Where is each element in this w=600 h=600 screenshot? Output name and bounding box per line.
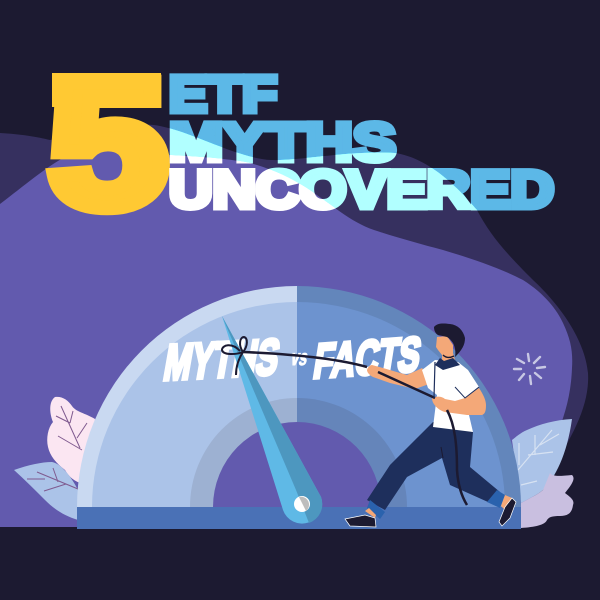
gauge right half: facts [297, 286, 521, 507]
shirt [422, 360, 479, 432]
needle [222, 316, 322, 524]
title line: MYTHS: MYTHS [169, 112, 396, 172]
label: vs: vs [289, 345, 311, 370]
back arm [367, 365, 432, 389]
choker line [443, 355, 454, 357]
title line: UNCOVERED: UNCOVERED [169, 160, 554, 220]
shirt rope strand [434, 362, 435, 398]
hair [434, 323, 465, 357]
character pulling rope [222, 323, 516, 527]
gauge inner ring [190, 398, 297, 507]
title line: ETF: ETF [169, 66, 277, 122]
front arm [432, 388, 486, 415]
gauge [77, 286, 521, 529]
icon: blue leaf [14, 462, 78, 520]
icon: pink leaf [47, 397, 95, 490]
gauge base bar [77, 507, 521, 529]
right leaves [512, 419, 574, 528]
label: FACTS: FACTS [310, 328, 425, 389]
icon: blue leaf [512, 419, 572, 503]
trouser crease [441, 447, 443, 458]
rope [243, 352, 467, 505]
ankles [365, 495, 512, 518]
title [49, 44, 554, 245]
icon: sparkle [514, 354, 545, 384]
gauge hub [213, 422, 381, 507]
trouser cuffs [367, 500, 385, 519]
needle pin [294, 496, 310, 512]
numeral 5: 5 [49, 44, 167, 245]
background blob: dark purple [0, 125, 588, 527]
right shoe [499, 498, 516, 526]
collar [435, 358, 460, 370]
rope knot [222, 337, 247, 375]
left leaves [14, 397, 95, 520]
gauge left half: myths [77, 286, 297, 507]
trousers [367, 422, 500, 510]
background blob: purple [0, 150, 572, 527]
face and neck [436, 336, 455, 361]
sleeve hem [455, 387, 479, 398]
left shoe [345, 515, 376, 527]
icon: lavender blob [521, 473, 574, 528]
label: MYTHS: MYTHS [160, 328, 284, 391]
